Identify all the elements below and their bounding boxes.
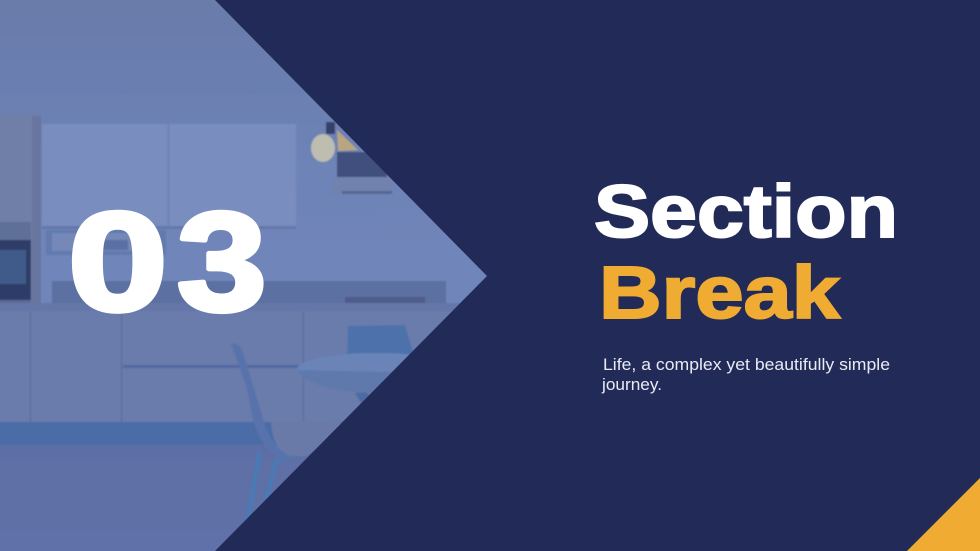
heading: Break: Break <box>599 251 841 334</box>
subtitle line 2: journey. <box>601 376 662 394</box>
tall cabinet <box>0 114 41 309</box>
under-cabinet shelf <box>46 230 166 255</box>
plinth <box>0 422 400 445</box>
digit zero: 0 <box>68 184 168 340</box>
backsplash strip <box>52 281 446 303</box>
far chair <box>347 325 413 355</box>
section number <box>68 183 267 340</box>
wall <box>0 0 500 310</box>
subtitle line 1: Life, a complex yet beautifully simple <box>603 356 890 374</box>
lower cabinets <box>0 311 470 422</box>
heading: Section: Section <box>594 170 898 253</box>
counter top <box>0 303 460 312</box>
subtitle text <box>601 356 890 394</box>
range hood and kettle <box>311 122 392 194</box>
wall cabinets <box>42 124 296 229</box>
oven <box>0 222 31 310</box>
yellow corner triangle <box>907 478 980 551</box>
floor <box>0 444 316 551</box>
round table <box>297 352 410 404</box>
hob <box>345 297 425 303</box>
near chair <box>231 343 345 522</box>
arrow-shaped kitchen photo <box>0 0 500 551</box>
digit three: 3 <box>177 183 267 340</box>
